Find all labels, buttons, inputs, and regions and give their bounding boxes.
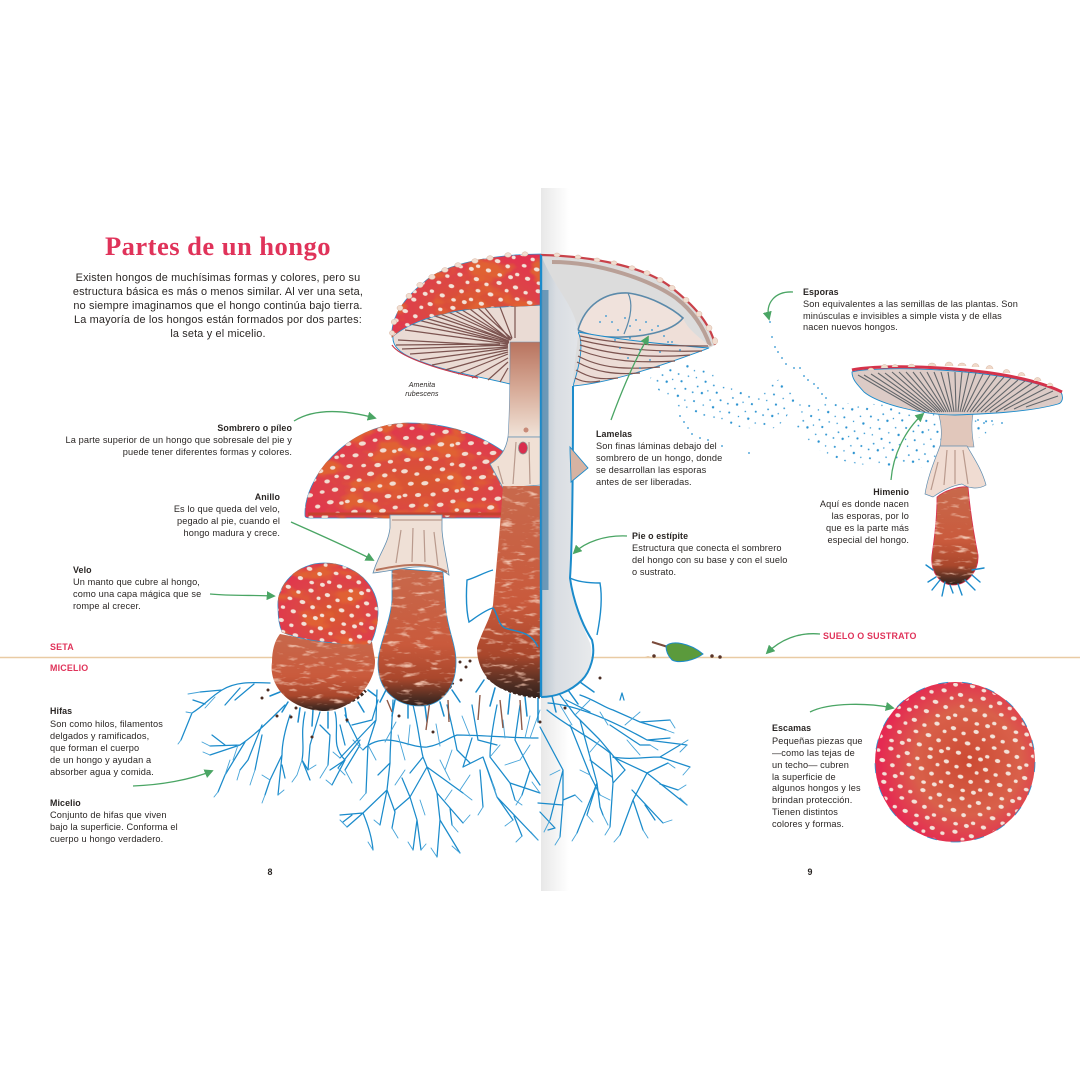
mushroom: medium: [305, 423, 512, 706]
label: esporas: [803, 287, 1018, 332]
scales disc: [875, 682, 1035, 842]
label: pie o estípite: o sustrato.: [632, 567, 676, 577]
base: button: [272, 634, 375, 711]
label: sombrero o píleo: Sombrero o píleo: [217, 423, 292, 433]
intro paragraph: Existen hongos de muchísimas formas y colores, pero su: [76, 272, 360, 284]
label: lamelas: antes de ser liberadas.: [596, 477, 692, 487]
label: sombrero o píleo: [65, 423, 292, 457]
stem upper and ring: [925, 412, 986, 497]
cap: right section: [541, 253, 718, 440]
arrow: sombrero: [294, 412, 375, 421]
label: seta: SETA: [50, 642, 74, 652]
intro paragraph: [73, 272, 363, 340]
label: sombrero o píleo: La parte superior de un hongo que sobresale del pie y: [65, 435, 292, 445]
arrow: himenio: [891, 414, 923, 480]
label: escamas: [772, 723, 863, 829]
label: himenio: Himenio: [873, 487, 909, 497]
intro paragraph: La mayoría de los hongos están formados por dos partes:: [74, 314, 362, 326]
stem: right section: [541, 255, 593, 697]
soil crumbs: [262, 661, 600, 737]
anillo: medium mushroom: [373, 515, 449, 575]
hifas: micelio roots: [178, 683, 690, 857]
label: lamelas: sombrero de un hongo, donde: [596, 453, 722, 463]
label: escamas: Tienen distintos: [772, 807, 838, 817]
underside gills: [852, 362, 1062, 415]
arrow: esporas: [768, 292, 793, 319]
label: sombrero o píleo: puede tener diferentes formas y colores.: [123, 447, 292, 457]
label: velo: como una capa mágica que se: [73, 589, 201, 599]
label: anillo: [174, 492, 280, 538]
volva outlines: [466, 570, 601, 647]
label: hifas: que forman el cuerpo: [50, 743, 139, 753]
label: himenio: especial del hongo.: [828, 535, 909, 545]
label: pie o estípite: [632, 531, 788, 577]
mushroom: button: [272, 563, 378, 711]
label: suelo o sustrato: SUELO O SUSTRATO: [823, 631, 917, 641]
label: anillo: Anillo: [255, 492, 280, 502]
label: himenio: Aquí es donde nacen: [820, 499, 909, 509]
label: micelio: Micelio: [50, 798, 81, 808]
mushroom: big half section: [389, 252, 718, 697]
arrow: anillo: [291, 522, 373, 560]
arrow: hifas: [133, 771, 212, 786]
hollow and lamelas: [573, 293, 710, 386]
species name: Amenita: [408, 382, 435, 389]
central page fold: [541, 188, 569, 891]
cap: left half: [389, 252, 541, 337]
arrow: velo: [210, 594, 274, 596]
title: Partes de un hongo: [105, 231, 331, 261]
soil line: [0, 656, 1080, 658]
label: hifas: Hifas: [50, 706, 72, 716]
label: micelio: cuerpo u hongo verdadero.: [50, 834, 163, 844]
label: lamelas: Lamelas: [596, 429, 632, 439]
underside gills: left half: [392, 305, 541, 384]
label: himenio: que es la parte más: [826, 523, 909, 533]
label: esporas: Esporas: [803, 287, 839, 297]
label: hifas: [50, 706, 163, 777]
label: anillo: hongo madura y crece.: [184, 528, 280, 538]
label: velo: rompe al crecer.: [73, 601, 141, 611]
spore cloud: [650, 322, 1002, 468]
label: lamelas: Son finas láminas debajo del: [596, 441, 717, 451]
stem: medium mushroom: [378, 568, 456, 706]
mushroom: small right: [852, 362, 1062, 596]
arrow: pie: [574, 536, 627, 553]
label: himenio: las esporas, por lo: [832, 511, 909, 521]
species name: [405, 382, 439, 398]
label: hifas: delgados y ramificados,: [50, 731, 149, 741]
label: hifas: absorber agua y comida.: [50, 767, 154, 777]
label: escamas: Escamas: [772, 723, 811, 733]
label: escamas: brindan protección.: [772, 795, 852, 805]
label: esporas: Son equivalentes a las semillas de las plantas. Son: [803, 299, 1018, 309]
label: himenio: [820, 487, 909, 545]
stem lower: [932, 487, 978, 585]
label: velo: [73, 565, 201, 611]
arrow: lamelas: [611, 337, 648, 420]
cap: medium mushroom: [305, 423, 512, 518]
label: pie o estípite: Estructura que conecta el sombrero: [632, 543, 782, 553]
page number 8: 8: [267, 867, 273, 877]
species name: rubescens: [405, 391, 439, 398]
label: velo: Un manto que cubre al hongo,: [73, 577, 200, 587]
label: anillo: pegado al pie, cuando el: [177, 516, 280, 526]
label: esporas: nacen nuevos hongos.: [803, 322, 898, 332]
label: escamas: algunos hongos y les: [772, 783, 861, 793]
page number 9: 9: [807, 867, 813, 877]
small roots: [926, 565, 984, 596]
label: escamas: la superficie de: [772, 772, 836, 782]
label: micelio: Conjunto de hifas que viven: [50, 810, 167, 820]
label: pie o estípite: Pie o estípite: [632, 531, 688, 541]
leaf: [645, 642, 720, 662]
intro paragraph: estructura básica es más o menos similar. Al ver una seta,: [73, 286, 363, 298]
label: anillo: Es lo que queda del velo,: [174, 504, 280, 514]
label: lamelas: [596, 429, 722, 487]
label: escamas: —como las tejas de: [772, 748, 855, 758]
intro paragraph: la seta y el micelio.: [170, 328, 266, 340]
arrow: escamas: [810, 704, 893, 712]
label: micelio: [50, 798, 178, 844]
stem: left half: [477, 342, 541, 697]
intro paragraph: no siempre imaginamos que el hongo continúa bajo tierra.: [73, 300, 363, 312]
label: hifas: de un hongo y ayudan a: [50, 755, 152, 765]
blue hairs at mushroom bases: [270, 680, 594, 728]
label: escamas: un techo— cubren: [772, 760, 849, 770]
label: micelio heading: MICELIO: [50, 663, 88, 673]
label: lamelas: se desarrollan las esporas: [596, 465, 707, 475]
label: escamas: Pequeñas piezas que: [772, 736, 863, 746]
label: micelio: bajo la superficie. Conforma el: [50, 822, 178, 832]
label: pie o estípite: del hongo con su base y con el suelo: [632, 555, 788, 565]
label: velo: Velo: [73, 565, 92, 575]
label: esporas: minúsculas e invisibles a simple vista y de ellas: [803, 311, 1002, 321]
arrow: suelo: [767, 634, 820, 653]
cap: button: [278, 563, 378, 644]
label: hifas: Son como hilos, filamentos: [50, 719, 163, 729]
label: escamas: colores y formas.: [772, 819, 844, 829]
